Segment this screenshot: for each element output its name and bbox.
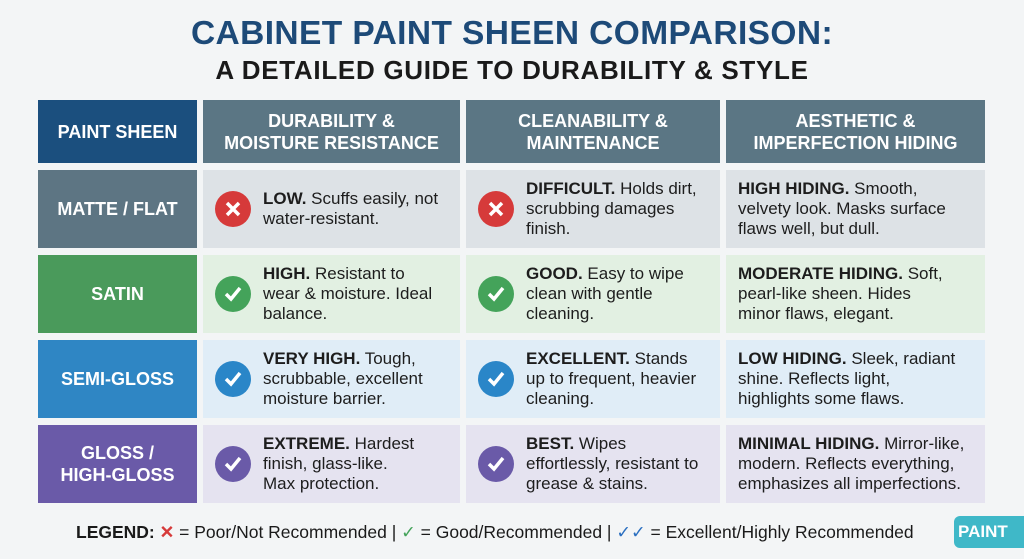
row label: matte: MATTE / FLAT <box>57 199 178 219</box>
cell: gloss cleanability <box>466 425 720 503</box>
cell: gloss aesthetic <box>726 425 985 503</box>
cell: gloss aesthetic: emphasizes all imperfections. <box>738 474 961 493</box>
cell: gloss aesthetic: modern. Reflects everything, <box>738 454 954 473</box>
cell: matte durability: LOW. Scuffs easily, not <box>263 189 438 208</box>
header: cleanability: MAINTENANCE <box>526 132 659 152</box>
legend: LEGEND: ✕ = Poor/Not Recommended | ✓ = Good/Recommended | ✓✓ = Excellent/Highly Recommended <box>76 522 914 542</box>
row label: gloss: GLOSS / <box>81 443 154 463</box>
cell: gloss durability <box>203 425 460 503</box>
header: paint sheen <box>38 100 197 163</box>
cell: semi aesthetic: highlights some flaws. <box>738 389 904 408</box>
cell: semi cleanability: up to frequent, heavier <box>526 369 696 388</box>
cell: matte cleanability: finish. <box>526 219 570 238</box>
header: paint sheen: PAINT SHEEN <box>58 122 177 142</box>
cell: semi aesthetic: LOW HIDING. Sleek, radiant <box>738 349 955 368</box>
header: durability: DURABILITY & <box>268 110 395 130</box>
cell: satin aesthetic: minor flaws, elegant. <box>738 304 894 323</box>
cell: gloss cleanability: effortlessly, resistant to <box>526 454 698 473</box>
cell: matte aesthetic: velvety look. Masks surface <box>738 199 946 218</box>
row label: gloss <box>38 425 197 503</box>
cell: satin durability <box>203 255 460 333</box>
cell: semi durability <box>203 340 460 418</box>
cell: matte aesthetic <box>726 170 985 248</box>
cell: satin aesthetic: pearl-like sheen. Hides <box>738 284 911 303</box>
cell: semi aesthetic <box>726 340 985 418</box>
cell: gloss cleanability: grease & stains. <box>526 474 648 493</box>
cell: matte durability: water-resistant. <box>263 209 379 228</box>
cell: matte cleanability <box>466 170 720 248</box>
row label: semi-gloss: SEMI-GLOSS <box>61 369 174 389</box>
logo <box>954 516 1024 548</box>
cell: gloss aesthetic: MINIMAL HIDING. Mirror-like, <box>738 434 964 453</box>
cell: semi cleanability: cleaning. <box>526 389 594 408</box>
cell: matte durability <box>203 170 460 248</box>
cell: semi aesthetic: shine. Reflects light, <box>738 369 890 388</box>
header: durability <box>203 100 460 163</box>
table <box>38 100 985 503</box>
row label: matte <box>38 170 197 248</box>
cell: gloss durability: finish, glass-like. <box>263 454 388 473</box>
header: aesthetic <box>726 100 985 163</box>
cell: semi durability: moisture barrier. <box>263 389 386 408</box>
row label: gloss: HIGH-GLOSS <box>60 465 174 485</box>
cell: satin aesthetic: MODERATE HIDING. Soft, <box>738 264 943 283</box>
cell: satin durability: wear & moisture. Ideal <box>263 284 432 303</box>
header: aesthetic: IMPERFECTION HIDING <box>753 132 958 152</box>
cell: matte aesthetic: flaws well, but dull. <box>738 219 880 238</box>
cell: semi durability: VERY HIGH. Tough, <box>263 349 416 368</box>
cell: satin aesthetic <box>726 255 985 333</box>
header: cleanability <box>466 100 720 163</box>
cell: satin cleanability: GOOD. Easy to wipe <box>526 264 684 283</box>
cell: semi cleanability <box>466 340 720 418</box>
header: aesthetic: AESTHETIC & <box>795 110 916 130</box>
cell: satin cleanability <box>466 255 720 333</box>
cell: gloss cleanability: BEST. Wipes <box>526 434 626 453</box>
cell: matte aesthetic: HIGH HIDING. Smooth, <box>738 179 918 198</box>
row label: satin: SATIN <box>91 284 144 304</box>
cell: matte cleanability: DIFFICULT. Holds dirt, <box>526 179 697 198</box>
row label: satin <box>38 255 197 333</box>
cell: satin cleanability: clean with gentle <box>526 284 653 303</box>
cell: semi durability: scrubbable, excellent <box>263 369 423 388</box>
cell: satin cleanability: cleaning. <box>526 304 594 323</box>
cell: satin durability: HIGH. Resistant to <box>263 264 405 283</box>
subtitle: A DETAILED GUIDE TO DURABILITY & STYLE <box>215 55 809 85</box>
title: CABINET PAINT SHEEN COMPARISON: <box>191 15 833 52</box>
cell: satin durability: balance. <box>263 304 327 323</box>
cell: semi cleanability: EXCELLENT. Stands <box>526 349 688 368</box>
cell: gloss durability: EXTREME. Hardest <box>263 434 414 453</box>
row label: semi-gloss <box>38 340 197 418</box>
header: durability: MOISTURE RESISTANCE <box>224 132 439 152</box>
cell: matte cleanability: scrubbing damages <box>526 199 674 218</box>
cell: gloss durability: Max protection. <box>263 474 379 493</box>
header: cleanability: CLEANABILITY & <box>518 110 668 130</box>
logo: PAINT <box>958 522 1008 541</box>
